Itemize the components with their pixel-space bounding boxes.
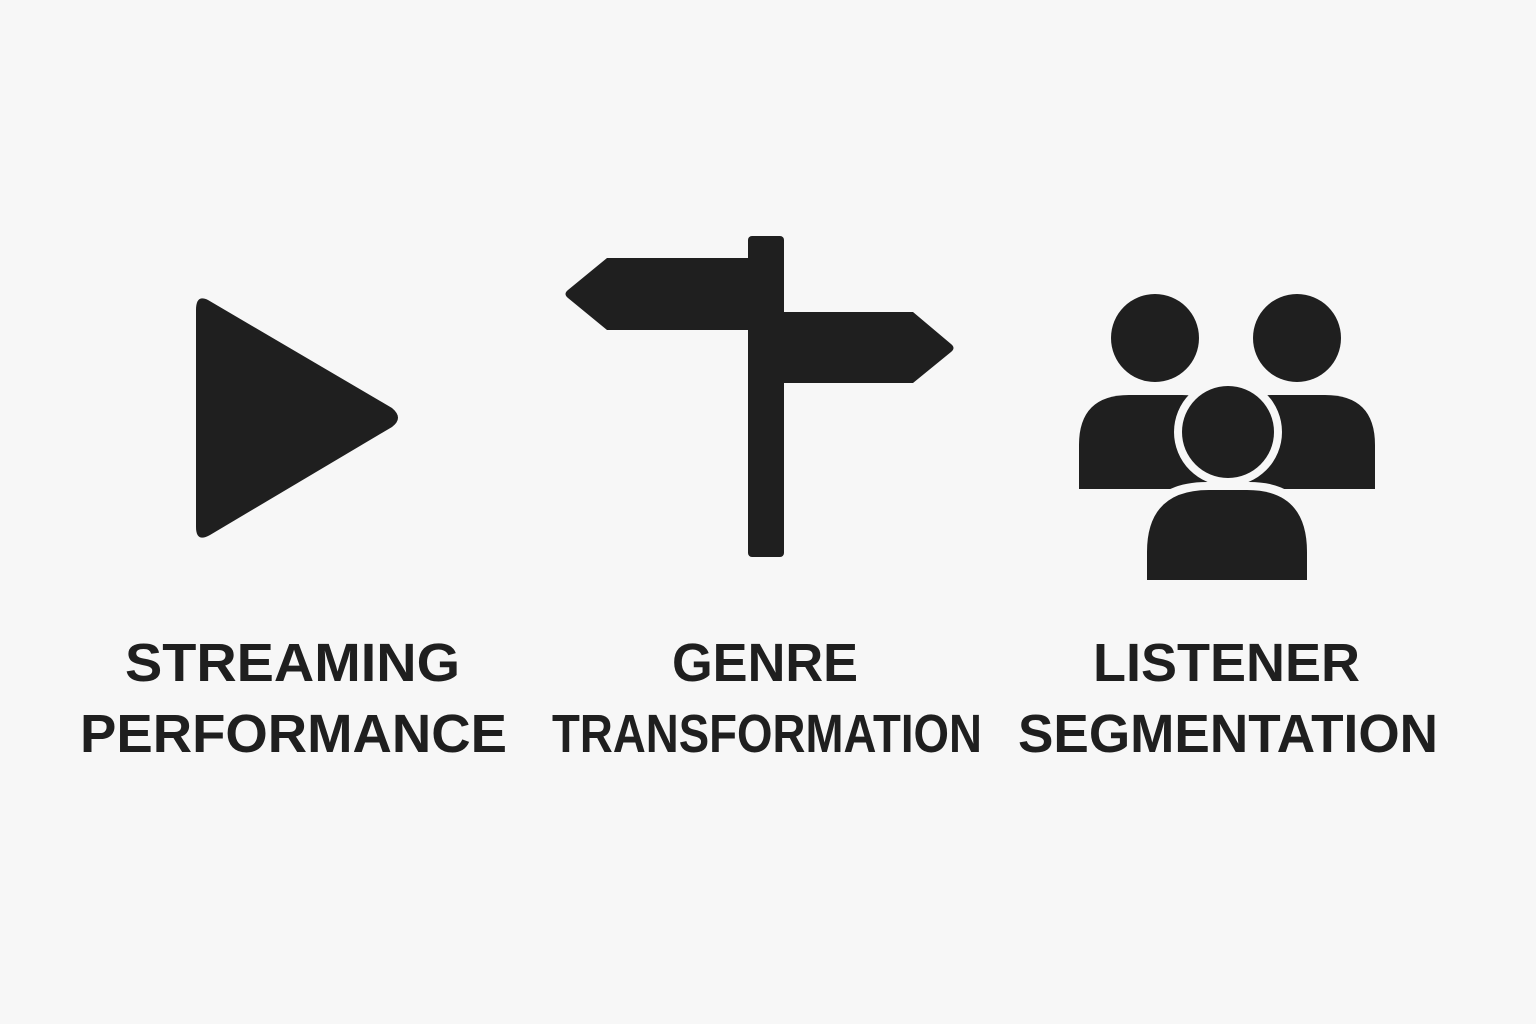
icon: group of people [1079,294,1375,588]
icon: play triangle [196,298,398,538]
label: streaming performance: STREAMING [125,633,460,693]
label: genre transformation: GENRE [672,633,858,693]
icon: signpost [566,236,954,557]
label: genre transformation [552,633,982,764]
label: streaming performance [80,633,507,764]
label: genre transformation: TRANSFORMATION [552,704,982,764]
label: listener segmentation: SEGMENTATION [1018,704,1438,764]
label: listener segmentation: LISTENER [1093,633,1360,693]
label: listener segmentation [1018,633,1438,764]
label: streaming performance: PERFORMANCE [80,704,507,764]
